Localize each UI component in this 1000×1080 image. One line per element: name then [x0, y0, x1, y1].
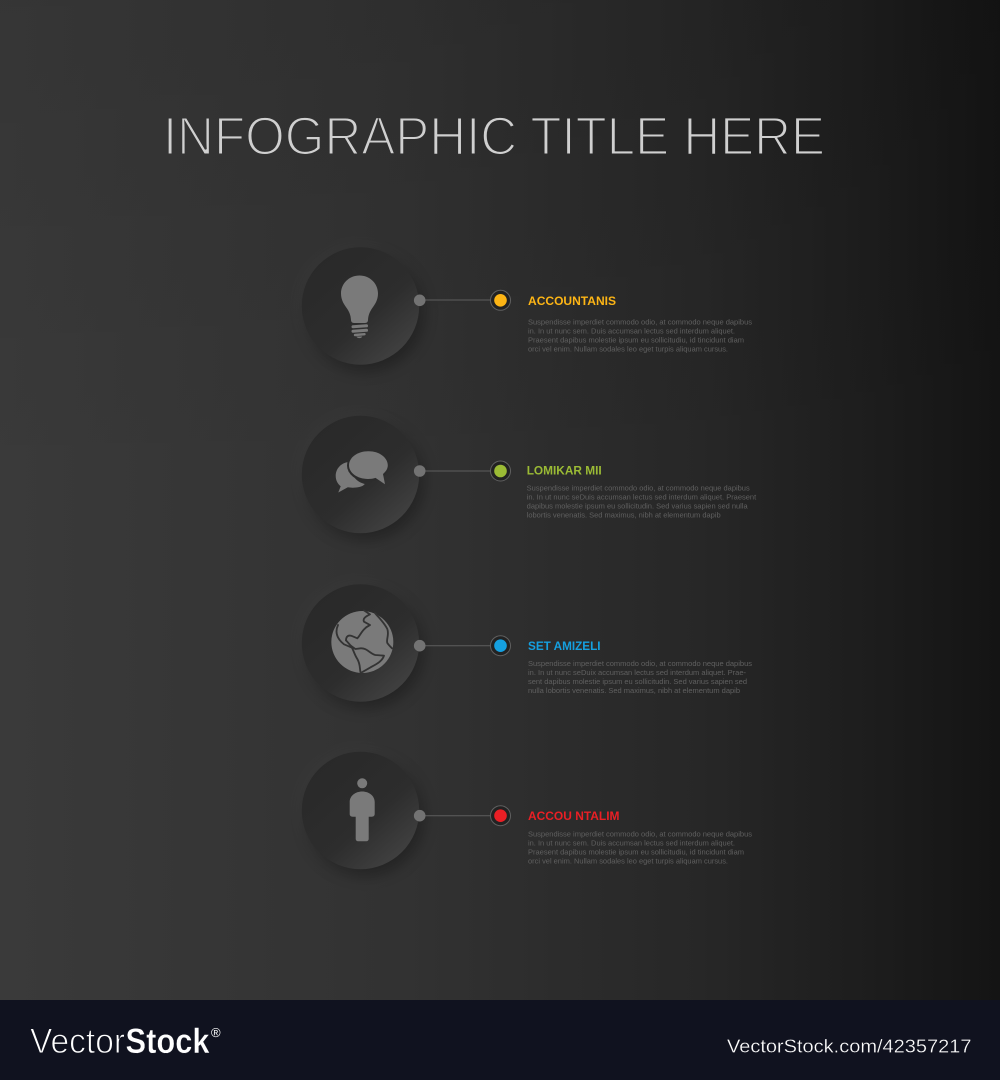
circle badge: [302, 584, 419, 702]
body text: [528, 659, 752, 695]
panel: accou ntalim: [302, 752, 752, 869]
icon: globe: [331, 610, 393, 673]
body text: in. In ut nunc sem. Duis accumsan lectus sed interdum aliquet.: [528, 326, 735, 335]
body text: orci vel enim. Nullam sodales leo eget turpis aliquam cursus.: [528, 856, 728, 865]
marker: [490, 290, 510, 310]
body text: in. In ut nunc seDuis accumsan lectus sed interdum aliquet. Praesent: [527, 493, 756, 502]
body text: sent dapibus molestie ipsum eu sollicitudin. Sed varius sapien sed: [528, 677, 747, 686]
connector: [414, 294, 491, 306]
body text: Praesent dapibus molestie ipsum eu sollicitudiu, id tincidunt diam: [528, 335, 744, 344]
panel: lomikar mii: [302, 416, 756, 533]
icon: speech bubbles: [336, 450, 389, 492]
footer logo: Stock: [126, 1022, 210, 1061]
body text: [528, 317, 752, 353]
body text: Suspendisse imperdiet commodo odio, at commodo neque dapibus: [528, 317, 752, 326]
connector: [414, 465, 491, 477]
circle badge: [302, 416, 419, 533]
body text: [527, 484, 756, 520]
connector: [414, 640, 491, 652]
body text: orci vel enim. Nullam sodales leo eget turpis aliquam cursus.: [528, 344, 728, 353]
body text: Suspendisse imperdiet commodo odio, at commodo neque dapibus: [528, 659, 752, 668]
heading: LOMIKAR MII: [527, 464, 602, 478]
body text: Suspendisse imperdiet commodo odio, at commodo neque dapibus: [528, 829, 752, 838]
footer logo: Vector: [30, 1022, 125, 1061]
footer bar: [0, 1000, 1000, 1080]
body text: [528, 829, 752, 865]
body text: in. In ut nunc sem. Duis accumsan lectus sed interdum aliquet.: [528, 838, 735, 847]
circle badge: [302, 247, 419, 365]
body text: lobortis venenatis. Sed maximus, nibh at elementum dapib: [527, 511, 721, 520]
marker: [490, 806, 510, 826]
footer logo: ®: [211, 1025, 221, 1040]
marker: [490, 636, 510, 656]
icon: person: [350, 778, 375, 841]
body text: dapibus molestie ipsum eu sollicitudin. Sed varius sapien sed nulla: [527, 502, 749, 511]
heading: ACCOU NTALIM: [528, 809, 620, 823]
connector: [414, 810, 491, 822]
footer logo: [30, 1022, 221, 1061]
panel: set amizeli: [302, 584, 752, 702]
circle badge: [302, 752, 419, 869]
body text: Praesent dapibus molestie ipsum eu sollicitudiu, id tincidunt diam: [528, 847, 744, 856]
heading: ACCOUNTANIS: [528, 294, 616, 308]
icon: light bulb: [341, 276, 378, 338]
title: INFOGRAPHIC TITLE HERE: [163, 106, 825, 166]
marker: [490, 461, 510, 481]
body text: Suspendisse imperdiet commodo odio, at commodo neque dapibus: [527, 484, 750, 493]
panel: accountanis: [302, 247, 752, 365]
heading: SET AMIZELI: [528, 639, 600, 653]
body text: in. In ut nunc seDuix accumsan lectus sed interdum aliquet. Prae-: [528, 668, 747, 677]
body text: nulla lobortis venenatis. Sed maximus, nibh at elementum dapib: [528, 686, 740, 695]
footer image id: VectorStock.com/42357217: [727, 1036, 972, 1057]
